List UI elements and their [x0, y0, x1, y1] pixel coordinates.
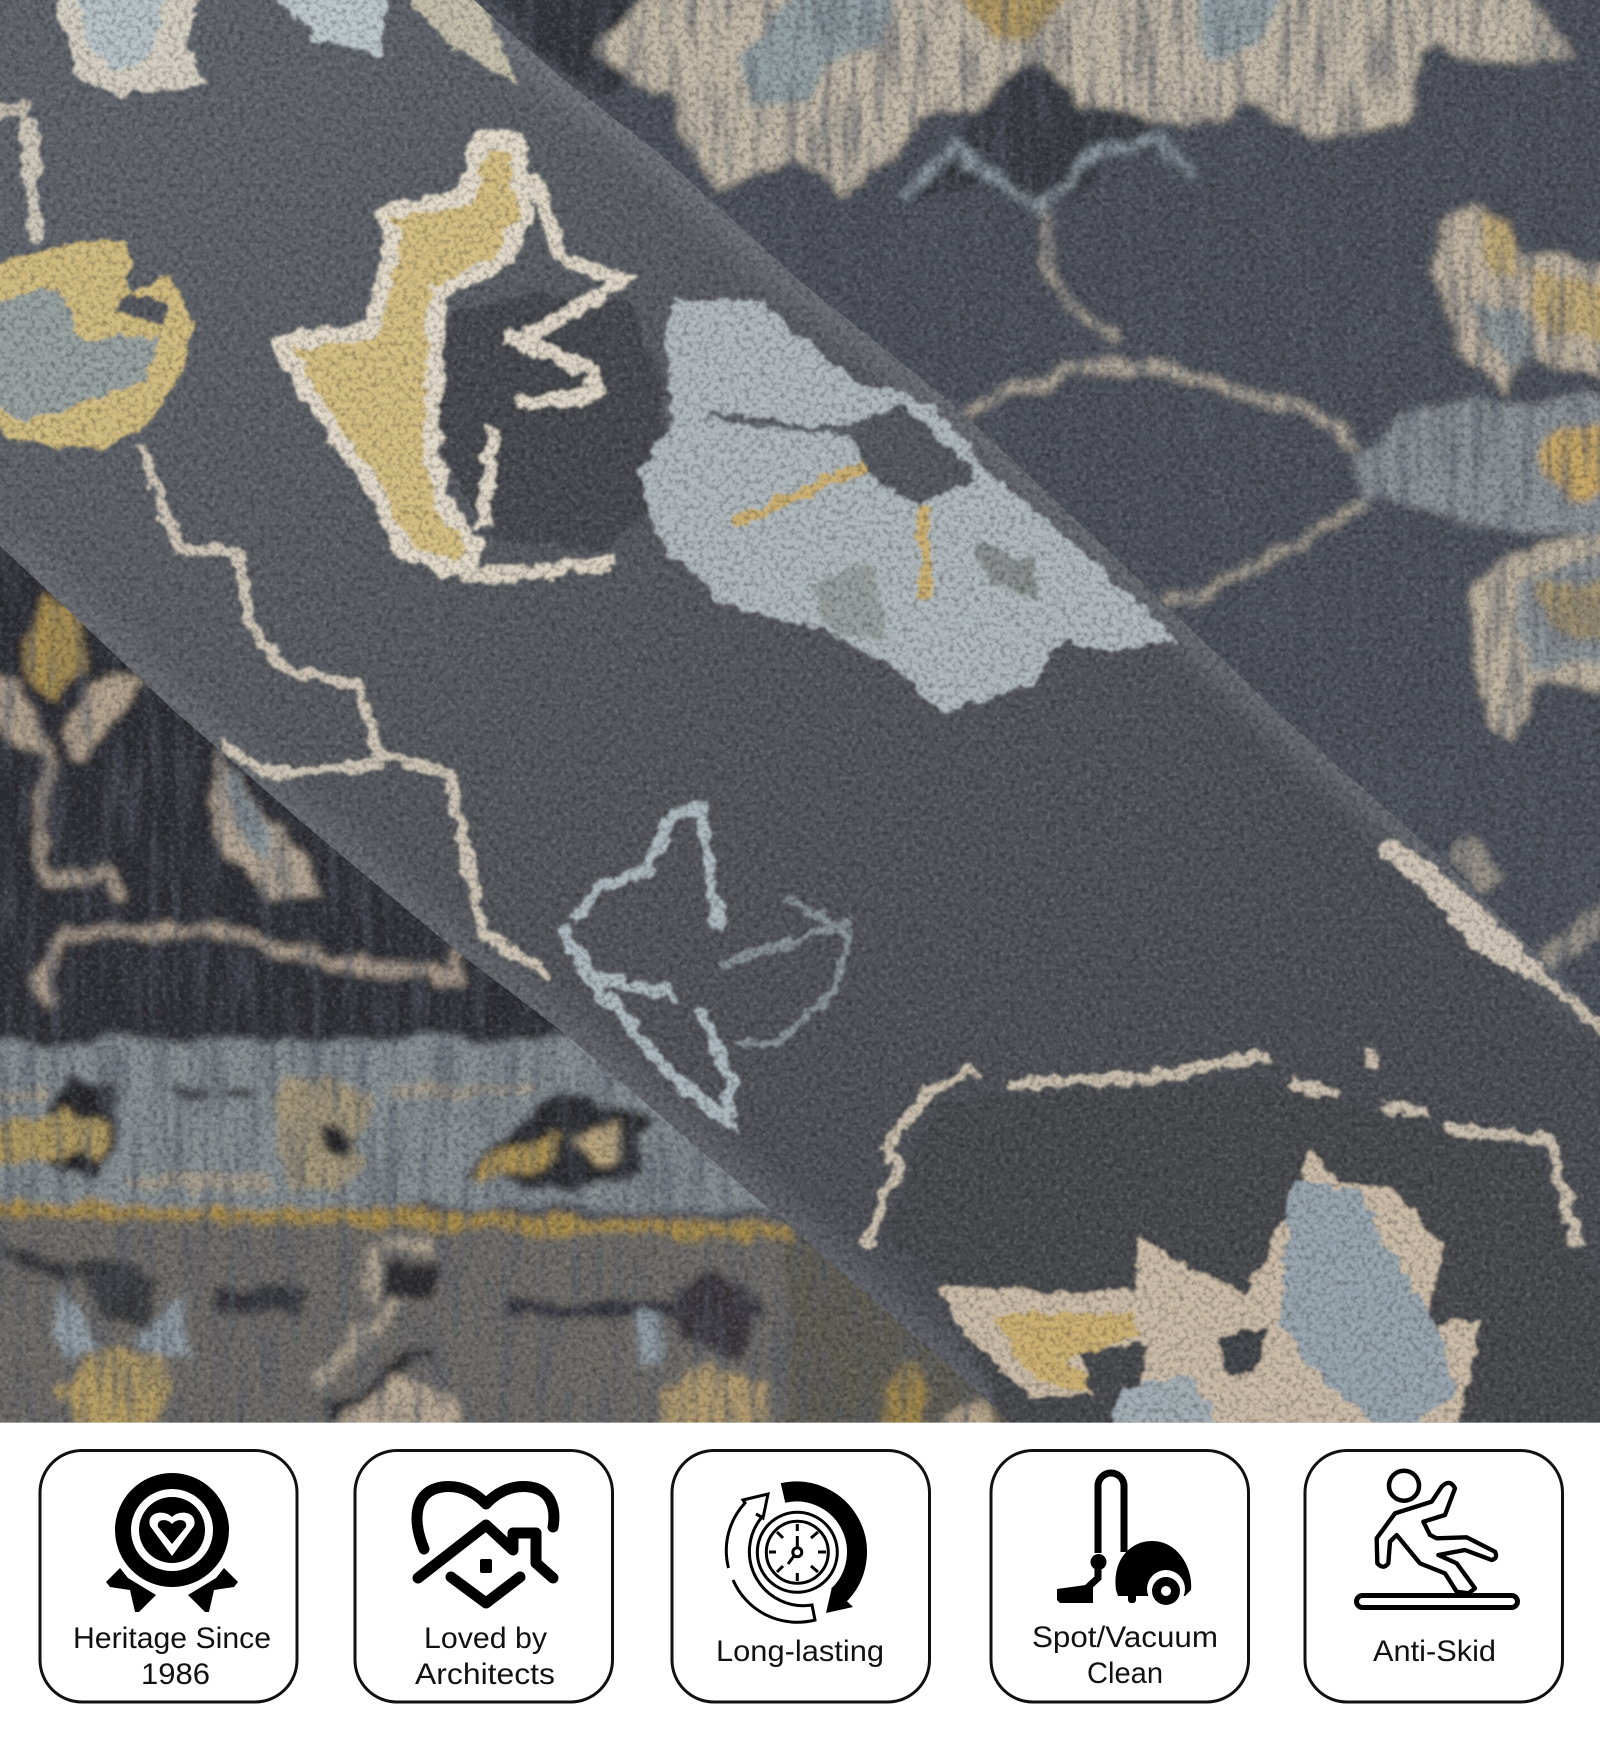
roll: dark field below the arc: [887, 1078, 1600, 1437]
roll: cream arc: [865, 1050, 1578, 1246]
label: Loved by: [424, 1622, 547, 1655]
label: Heritage Since: [73, 1622, 271, 1655]
roll: left gold and grey flower: [0, 241, 193, 449]
roll: large pale blue flower: [640, 298, 1179, 713]
badge: Spot/Vacuum Clean: [991, 1450, 1248, 1702]
badge: Loved by Architects: [355, 1450, 612, 1702]
badge: Anti-Skid: [1305, 1450, 1562, 1702]
label: Architects: [415, 1658, 555, 1691]
label: [415, 1622, 555, 1691]
icon: house inside heart: [417, 1486, 554, 1603]
roll: top-left flowers: [0, 0, 516, 241]
lower-left field: dark motifs: [0, 595, 460, 1011]
roll: central gold and cream flower: [281, 137, 623, 575]
label: Clean: [1087, 1657, 1163, 1690]
badge: Long-lasting: [672, 1450, 930, 1702]
gold line: [0, 1208, 797, 1235]
icon: medal with heart: [106, 1469, 238, 1612]
icon: person slipping on floor: [1356, 1471, 1518, 1608]
border band: flower motifs: [0, 1078, 648, 1195]
label: 1986: [141, 1658, 210, 1691]
icon: clock with circular arrows: [726, 1491, 857, 1622]
label: [73, 1622, 271, 1691]
label: Long-lasting: [716, 1635, 884, 1668]
roll: pale blue outlined flower: [561, 808, 730, 1123]
icon: vacuum cleaner: [1057, 1473, 1191, 1608]
roll: cream stripe at the right edge: [1375, 840, 1600, 1039]
roll: dark patch inside vine: [432, 292, 662, 550]
lower band: motifs: [0, 1241, 999, 1437]
upper field: cream medallion and flowers: [483, 0, 1600, 966]
roll: cream zigzag vine: [140, 444, 550, 977]
label: [1032, 1621, 1218, 1690]
label: Spot/Vacuum: [1032, 1621, 1218, 1654]
badge: Heritage Since 1986: [40, 1450, 297, 1702]
roll: bottom flower: [938, 1145, 1482, 1437]
label: Anti-Skid: [1373, 1635, 1496, 1668]
